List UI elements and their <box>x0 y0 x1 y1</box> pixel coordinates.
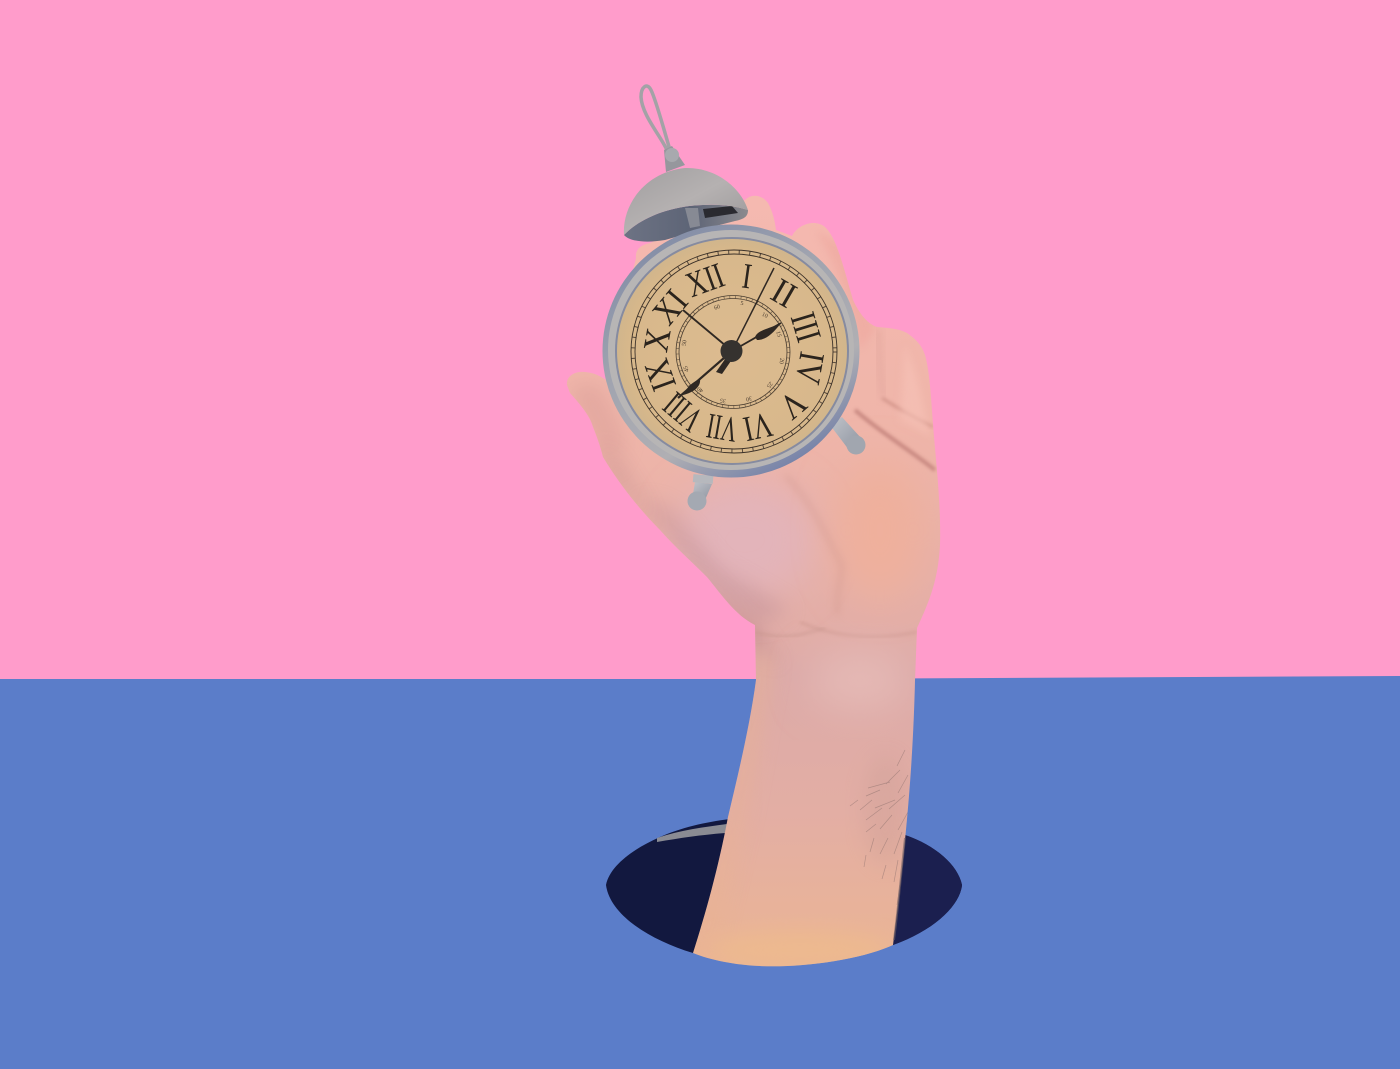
arm: left shadow <box>696 681 756 944</box>
finger creases <box>855 410 935 470</box>
right foot <box>830 417 866 454</box>
seconds numbers: 10 <box>761 312 769 320</box>
roman numerals: VIII <box>656 384 711 439</box>
inner seconds track <box>676 296 790 408</box>
background: pink wall <box>0 0 1400 680</box>
roman numerals <box>636 255 832 449</box>
roman numerals: VI <box>740 405 776 449</box>
roman numerals: X <box>636 325 679 355</box>
seconds numbers: 40 <box>696 385 705 393</box>
bell post <box>664 146 685 172</box>
arm: hair shading <box>878 791 894 844</box>
arm hair edge <box>894 838 905 940</box>
roman numerals: IX <box>637 354 685 396</box>
background: blue floor <box>0 676 1400 1069</box>
seconds numbers: 25 <box>765 380 773 389</box>
palm: thenar pink shading <box>682 480 812 594</box>
roman numerals: III <box>782 308 828 347</box>
roman numerals: VII <box>704 405 740 449</box>
roman numerals: II <box>764 271 803 316</box>
seconds numbers: 15 <box>774 331 782 338</box>
roman numerals: IV <box>787 349 832 387</box>
seconds numbers: 30 <box>745 394 752 402</box>
palm crease <box>785 475 842 615</box>
roman numerals: V <box>771 382 814 427</box>
bell dark mechanism <box>703 206 738 218</box>
roman numerals: XII <box>681 255 729 305</box>
palm: peach right side <box>844 475 915 582</box>
hand and arm <box>567 196 940 968</box>
seconds numbers: 50 <box>682 340 688 347</box>
seconds numbers: 20 <box>778 357 784 364</box>
seconds numbers <box>682 301 784 403</box>
wrist creases <box>804 623 912 636</box>
hole in the floor <box>606 819 962 953</box>
bell inner <box>624 205 748 242</box>
clock hands <box>678 268 781 398</box>
clock case <box>602 224 860 478</box>
roman numerals: I <box>740 256 754 296</box>
clock dial <box>617 239 847 463</box>
arm: wrist highlight <box>824 656 915 706</box>
minute track <box>631 250 837 453</box>
seconds numbers: 45 <box>683 365 691 373</box>
alarm clock <box>602 86 866 510</box>
bottom foot <box>688 474 713 510</box>
grey strip inside hole <box>657 824 727 842</box>
roman numerals: XI <box>645 282 696 333</box>
seconds numbers: 5 <box>740 301 744 307</box>
bell ring handle <box>641 86 670 150</box>
seconds numbers: 35 <box>720 397 727 403</box>
bell dome <box>624 168 748 235</box>
seconds numbers: 60 <box>713 304 721 312</box>
palm: lower-left shadow edge <box>610 463 768 650</box>
